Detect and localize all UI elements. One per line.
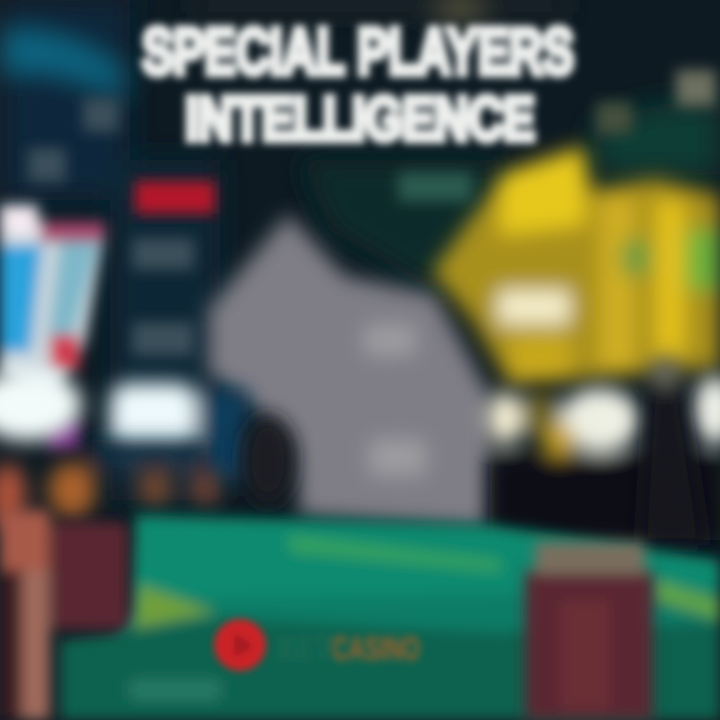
- table: green floor: [60, 515, 720, 720]
- pillar: left maroon: [0, 510, 128, 720]
- logo: [214, 619, 420, 671]
- logo wordmark: BET: [278, 630, 330, 668]
- title: [142, 14, 574, 154]
- building: golden right: [432, 145, 720, 385]
- figure: dark person right: [640, 358, 705, 545]
- lights: white blobs left: [0, 369, 248, 480]
- pillar: right maroon: [525, 542, 653, 720]
- people: left heads: [0, 415, 294, 527]
- sidebar text placeholders: [135, 181, 215, 214]
- building: grey centre: [208, 214, 492, 528]
- background: upper scene tones: [0, 0, 720, 500]
- slot machine: [0, 205, 105, 450]
- lights: [487, 392, 523, 444]
- logo wordmark: CASINO: [332, 630, 420, 668]
- grey text rows: [28, 70, 716, 356]
- icon: red circle: [214, 619, 266, 671]
- red label: [135, 181, 215, 214]
- title: INTELLIGENCE: [185, 85, 535, 154]
- panel: dark tables under gold building: [487, 376, 720, 540]
- logo wordmark: [278, 630, 420, 668]
- window highlights: [365, 325, 425, 475]
